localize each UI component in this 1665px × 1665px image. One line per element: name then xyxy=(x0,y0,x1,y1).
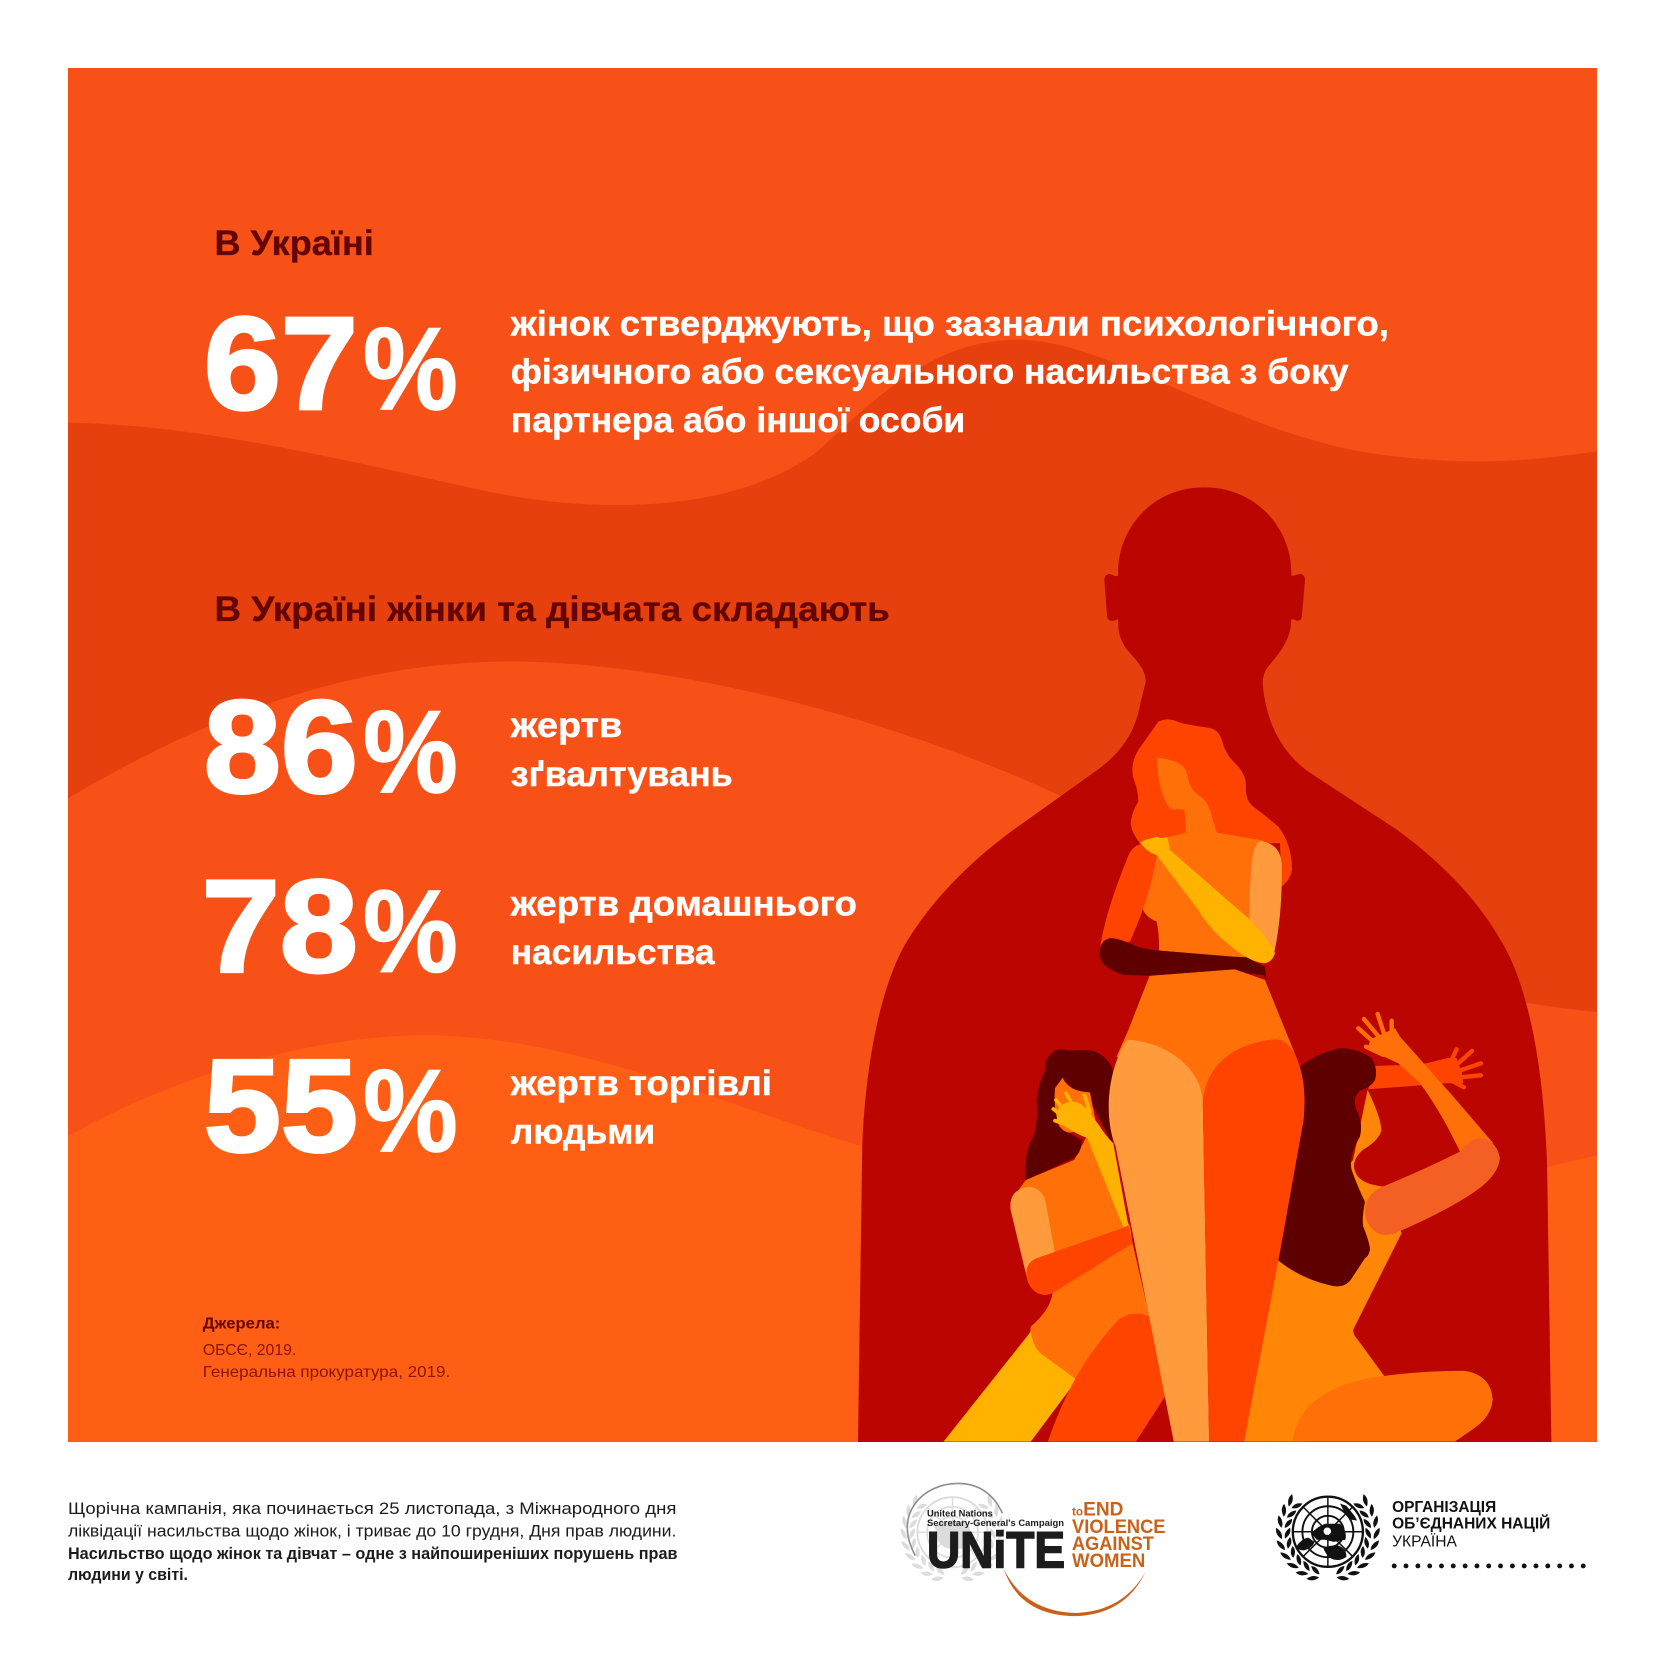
body left woman xyxy=(1019,1137,1165,1397)
footer campaign text: Щорічна кампанія, яка починається 25 листопада, з Міжнародного дня xyxy=(68,1500,676,1518)
section heading: women and girls: В Україні жінки та дівчата складають xyxy=(214,590,890,629)
description for 55% xyxy=(510,1064,772,1152)
statistic 86% xyxy=(204,673,458,820)
face left woman xyxy=(1055,1078,1097,1133)
grey UN emblem watermark xyxy=(901,1494,1004,1583)
red leg left woman xyxy=(1048,1314,1165,1442)
upper arm left woman xyxy=(1010,1187,1055,1277)
description for 67%: фізичного або сексуального насильства з боку xyxy=(511,352,1349,391)
arm and hand covering face xyxy=(1053,1093,1128,1227)
panel: orange background with waves xyxy=(68,68,1597,1442)
hips xyxy=(1117,969,1297,1107)
woman: lower right kneeling xyxy=(1244,1014,1500,1442)
logo: UNiTE campaign xyxy=(901,1483,1165,1616)
large head-and-shoulders silhouette xyxy=(858,487,1551,1442)
footer campaign text: Насильство щодо жінок та дівчат – одне з найпоширеніших порушень прав xyxy=(68,1545,677,1563)
to END VIOLENCE AGAINST WOMEN: WOMEN xyxy=(1072,1551,1145,1572)
UN Ukraine wordmark: УКРАЇНА xyxy=(1392,1533,1457,1551)
forearm left woman xyxy=(1026,1226,1133,1295)
description for 67% xyxy=(510,305,1389,440)
body right woman xyxy=(1244,1090,1402,1442)
globe rings xyxy=(1293,1497,1363,1567)
campaign caption second line: Secretary-General's Campaign xyxy=(927,1518,1064,1528)
hair right woman xyxy=(1278,1048,1376,1286)
description for 78%: жертв домашнього xyxy=(510,884,857,923)
UN Ukraine wordmark: ОБ’ЄДНАНИХ НАЦІЙ xyxy=(1392,1514,1550,1533)
description for 86% xyxy=(510,706,733,794)
description for 67%: жінок стверджують, що зазнали психологічного, xyxy=(510,305,1389,344)
statistic 78%: % xyxy=(363,866,458,997)
description for 67%: партнера або іншої особи xyxy=(511,401,965,440)
yellow leg left woman xyxy=(944,1332,1077,1442)
description for 55%: жертв торгівлі xyxy=(510,1064,772,1103)
continents xyxy=(1297,1504,1357,1560)
dotted line xyxy=(1392,1563,1586,1568)
hair left woman xyxy=(1025,1049,1113,1180)
description for 78%: насильства xyxy=(511,933,715,972)
to END VIOLENCE AGAINST WOMEN: VIOLENCE xyxy=(1072,1517,1165,1538)
statistic 67% xyxy=(204,290,458,437)
sources: Генеральна прокуратура, 2019. xyxy=(203,1364,450,1381)
description for 86%: жертв xyxy=(510,706,622,745)
statistic 55%: % xyxy=(363,1045,458,1176)
thigh right woman xyxy=(1292,1371,1493,1442)
right leg xyxy=(1203,1039,1305,1442)
UNiTE wordmark: UNiTE xyxy=(927,1521,1065,1578)
woman: lower left kneeling xyxy=(944,1049,1165,1442)
statistic 55% xyxy=(204,1032,458,1179)
statistic 78%: 78 xyxy=(202,853,358,1000)
description for 78% xyxy=(510,884,857,972)
to END VIOLENCE AGAINST WOMEN xyxy=(1072,1499,1165,1572)
sources: ОБСЄ, 2019. xyxy=(203,1342,296,1359)
woman: center standing, upper body xyxy=(1100,719,1292,980)
illustration: silhouette and three women xyxy=(858,487,1551,1442)
statistic 86%: 86 xyxy=(204,673,358,820)
forearm right woman xyxy=(1365,1138,1500,1235)
torso and face xyxy=(1140,758,1277,958)
diagonal arm xyxy=(1140,837,1275,963)
sources xyxy=(203,1315,450,1381)
statistic 67%: % xyxy=(363,303,458,434)
footer campaign text: ліквідації насильства щодо жінок, і триває до 10 грудня, Дня прав людини. xyxy=(68,1523,676,1541)
far arm with hand xyxy=(1368,1049,1481,1089)
statistic 67%: 67 xyxy=(204,290,358,437)
statistic 78% xyxy=(202,853,458,1000)
section heading: В Україні: В Україні xyxy=(214,224,374,263)
footer campaign text xyxy=(68,1500,677,1584)
left leg xyxy=(1109,1040,1209,1442)
statistic 86%: % xyxy=(363,686,458,817)
UN Ukraine wordmark xyxy=(1392,1499,1550,1551)
olive wreath xyxy=(1276,1494,1380,1583)
hair center woman xyxy=(1131,719,1292,887)
footer campaign text: людини у світі. xyxy=(68,1566,188,1584)
to END VIOLENCE AGAINST WOMEN: AGAINST xyxy=(1072,1534,1154,1555)
orange swoosh xyxy=(1003,1568,1146,1616)
to END VIOLENCE AGAINST WOMEN: toEND xyxy=(1072,1499,1123,1520)
upper arm right xyxy=(1249,841,1282,957)
UN Ukraine wordmark: ОРГАНІЗАЦІЯ xyxy=(1392,1499,1496,1516)
description for 86%: зґвалтувань xyxy=(511,755,733,794)
raised arm with hand xyxy=(1358,1014,1493,1152)
description for 55%: людьми xyxy=(511,1113,655,1152)
campaign caption: United Nations xyxy=(927,1508,993,1518)
upper arm left xyxy=(1100,844,1157,948)
sources: Джерела: xyxy=(203,1315,280,1332)
woman: center standing, hips and legs xyxy=(1109,969,1305,1442)
dark forearm xyxy=(1100,938,1267,980)
statistic 55%: 55 xyxy=(204,1032,358,1179)
grey arc xyxy=(907,1483,1002,1556)
logo: UN emblem xyxy=(1276,1494,1380,1583)
